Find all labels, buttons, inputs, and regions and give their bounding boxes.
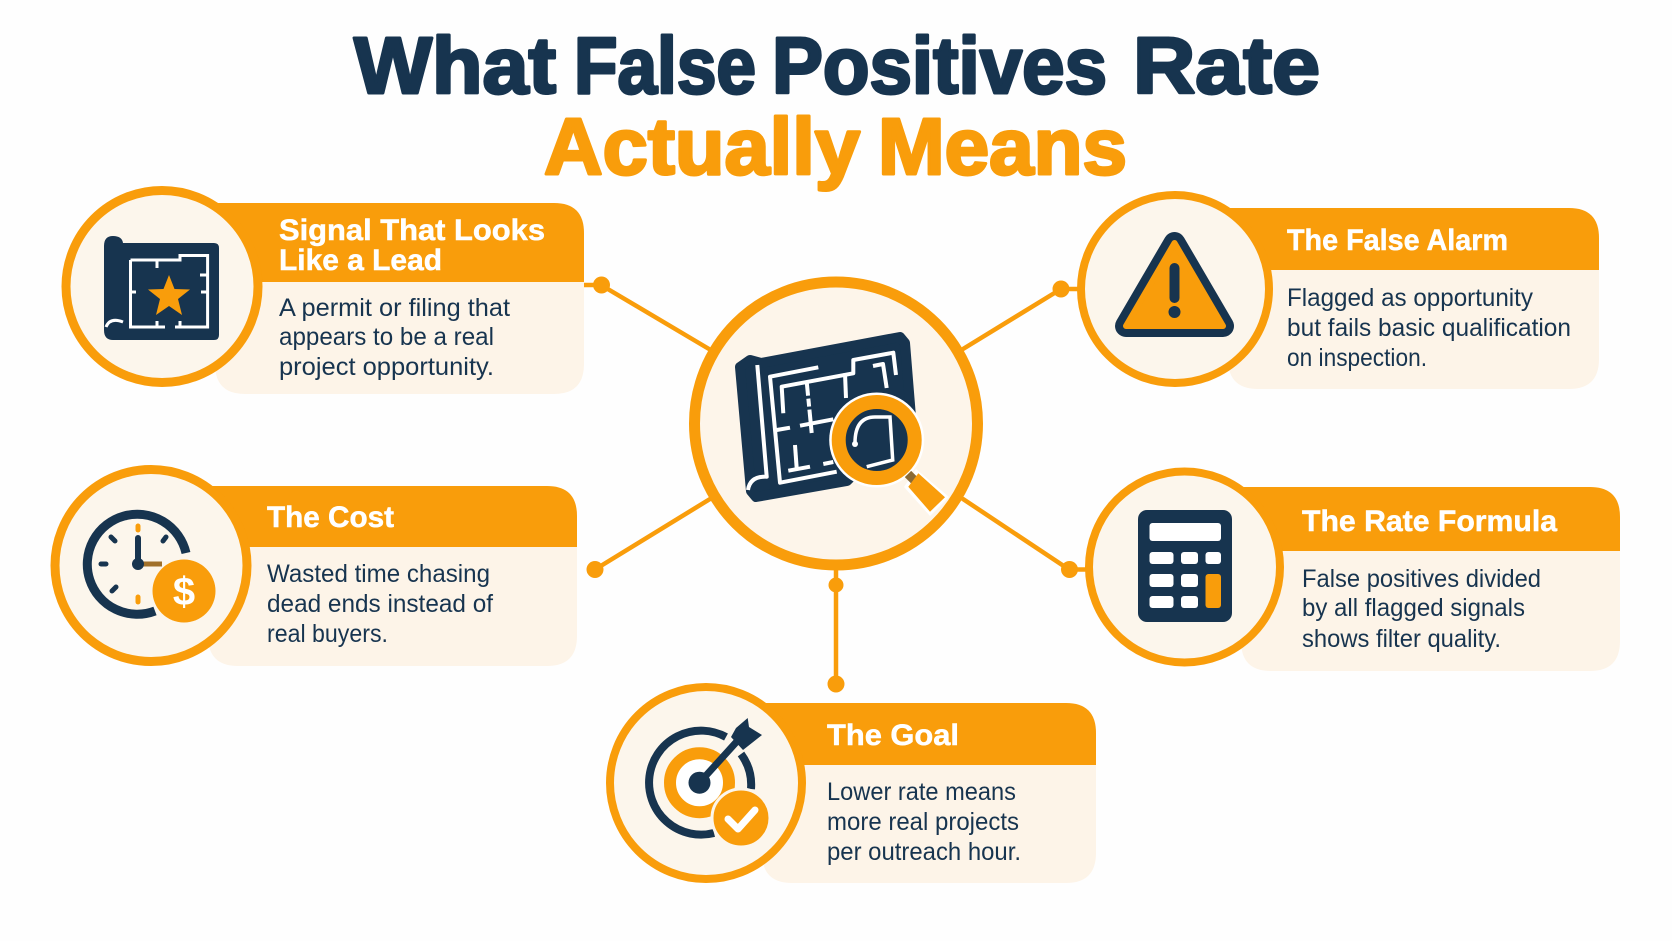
heading: Signal That Looks bbox=[279, 214, 545, 247]
heading: The Goal bbox=[827, 719, 959, 752]
panel: the rate formula bbox=[1089, 472, 1620, 671]
title: Means bbox=[878, 102, 1127, 191]
title: Actually bbox=[544, 102, 861, 191]
title: What bbox=[354, 21, 556, 110]
text block: Lower rate means bbox=[827, 778, 1016, 806]
text block: by all flagged signals bbox=[1302, 594, 1525, 622]
heading: The False Alarm bbox=[1287, 224, 1508, 257]
text block: project opportunity. bbox=[279, 353, 494, 381]
icon: blueprint with magnifying glass bbox=[740, 337, 949, 516]
text block bbox=[1302, 565, 1541, 653]
connector lines bbox=[584, 276, 1086, 692]
text block bbox=[267, 560, 493, 648]
icon: blueprint with star bbox=[104, 236, 219, 340]
title bbox=[354, 21, 1320, 191]
text block: Wasted time chasing bbox=[267, 560, 490, 588]
title: Rate bbox=[1133, 21, 1320, 110]
text block: A permit or filing that bbox=[279, 294, 510, 322]
panel: the goal bbox=[610, 687, 1096, 883]
heading: Like a Lead bbox=[279, 244, 442, 277]
text block: more real projects bbox=[827, 808, 1019, 836]
icon: warning triangle bbox=[1126, 243, 1223, 326]
title: False bbox=[574, 21, 756, 110]
text block: appears to be a real bbox=[279, 323, 494, 351]
panel: the cost bbox=[55, 470, 577, 666]
title: Positives bbox=[772, 21, 1107, 110]
text block bbox=[1287, 284, 1571, 372]
text block bbox=[827, 778, 1021, 866]
panel: central hub bbox=[694, 282, 978, 565]
text block: dead ends instead of bbox=[267, 590, 493, 618]
icon: clock and dollar coin: $ bbox=[173, 570, 195, 614]
text block: False positives divided bbox=[1302, 565, 1541, 593]
text block: Flagged as opportunity bbox=[1287, 284, 1533, 312]
text block: but fails basic qualification bbox=[1287, 314, 1571, 342]
text block: on inspection. bbox=[1287, 344, 1427, 372]
heading: The Cost bbox=[267, 501, 394, 534]
panel: the false alarm bbox=[1081, 195, 1599, 389]
panel: signal that looks like a lead bbox=[66, 190, 584, 394]
icon: calculator bbox=[1138, 510, 1232, 622]
text block bbox=[279, 294, 510, 381]
text block: per outreach hour. bbox=[827, 838, 1021, 866]
heading: The Rate Formula bbox=[1302, 505, 1557, 538]
icon: target with arrow and check bbox=[649, 718, 770, 847]
icon: clock and dollar coin bbox=[87, 514, 216, 622]
text block: real buyers. bbox=[267, 620, 388, 648]
heading bbox=[279, 214, 545, 277]
text block: shows filter quality. bbox=[1302, 625, 1501, 653]
